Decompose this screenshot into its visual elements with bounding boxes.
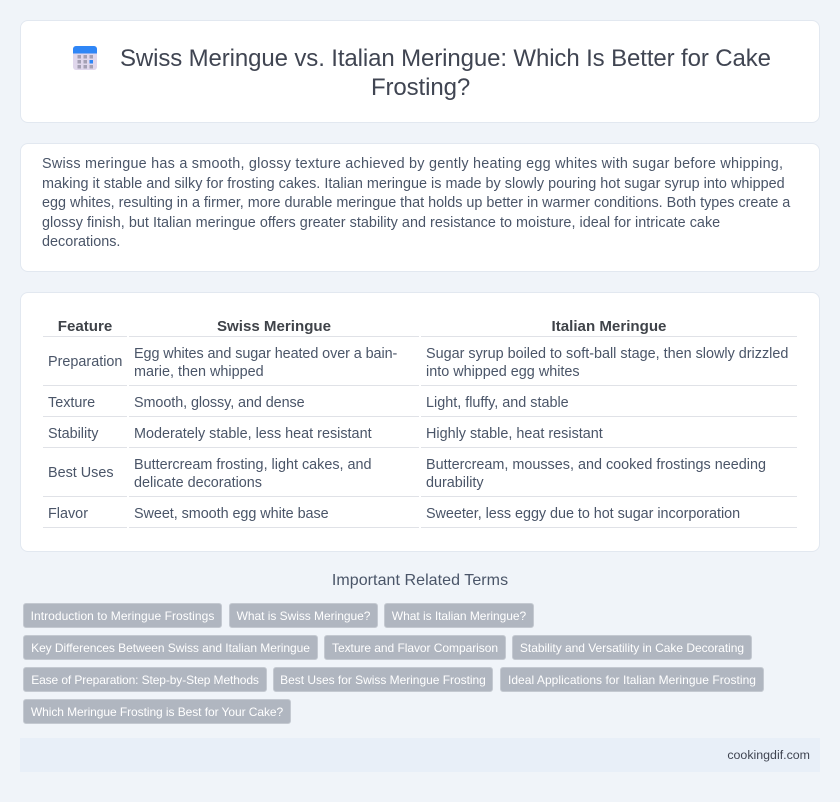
row: preparation	[48, 346, 788, 380]
row: preparation: marie, then whipped	[134, 364, 264, 380]
row: preparation: Preparation	[48, 354, 122, 370]
footer	[20, 738, 820, 772]
icon: calendar	[73, 46, 97, 70]
row: preparation: Egg whites and sugar heated over a bain-	[134, 346, 397, 362]
title	[120, 45, 771, 101]
tag: What is Italian Meringue?	[392, 609, 526, 623]
row: best uses	[48, 457, 766, 491]
row: stability	[48, 426, 603, 442]
tag: Ease of Preparation: Step-by-Step Methods	[31, 673, 259, 687]
tag: Introduction to Meringue Frostings	[31, 609, 214, 623]
heading: important related terms: Important Related Terms	[332, 572, 508, 589]
tag	[384, 603, 534, 628]
title: Frosting?	[371, 74, 470, 101]
tag: Texture and Flavor Comparison	[332, 641, 498, 655]
row: flavor	[48, 506, 740, 522]
text block: introduction	[42, 156, 790, 250]
tag: Ideal Applications for Italian Meringue Frosting	[508, 673, 756, 687]
tag	[23, 699, 291, 724]
footer source: cookingdif.com	[727, 748, 810, 762]
row: flavor: Flavor	[48, 506, 88, 522]
table header: Italian Meringue	[552, 318, 666, 335]
tag: Which Meringue Frosting is Best for Your Cake?	[31, 705, 283, 719]
tag	[500, 667, 764, 692]
row: stability: Highly stable, heat resistant	[426, 426, 603, 442]
panel: introduction	[20, 143, 820, 272]
row: texture: Light, fluffy, and stable	[426, 395, 569, 411]
row: best uses: durability	[426, 475, 484, 491]
row: texture: Texture	[48, 395, 95, 411]
text block: introduction: egg whites, resulting in a firmer, more durable meringue that holds up better in warmer conditions. Both types create a	[42, 195, 790, 211]
row: stability: Moderately stable, less heat resistant	[134, 426, 372, 442]
row: best uses: delicate decorations	[134, 475, 262, 491]
row: best uses: Buttercream, mousses, and cooked frostings needing	[426, 457, 766, 473]
row: texture	[48, 395, 569, 411]
tag	[23, 667, 267, 692]
table header: Feature	[58, 318, 112, 335]
tag: Stability and Versatility in Cake Decorating	[520, 641, 744, 655]
text block: introduction: decorations.	[42, 234, 120, 250]
row: flavor: Sweeter, less eggy due to hot sugar incorporation	[426, 506, 740, 522]
panel: comparison table	[20, 292, 820, 552]
tag	[512, 635, 752, 660]
tag: Key Differences Between Swiss and Italian Meringue	[31, 641, 310, 655]
row: preparation: Sugar syrup boiled to soft-ball stage, then slowly drizzled	[426, 346, 788, 362]
title: Swiss Meringue vs. Italian Meringue: Which Is Better for Cake	[120, 45, 771, 72]
row: flavor: Sweet, smooth egg white base	[134, 506, 329, 522]
table header: Swiss Meringue	[217, 318, 331, 335]
tag	[324, 635, 506, 660]
row: best uses: Best Uses	[48, 465, 114, 481]
row: stability: Stability	[48, 426, 98, 442]
row: best uses: Buttercream frosting, light cakes, and	[134, 457, 372, 473]
text block: introduction: glossy finish, but Italian meringue offers greater stability and resistance to moisture, ideal for intricate cake	[42, 214, 720, 230]
tag	[23, 635, 318, 660]
text block: introduction: making it stable and silky for frosting cakes. Italian meringue is made by slowly pouring hot sugar syrup into whipped	[42, 176, 785, 192]
tag	[229, 603, 378, 628]
panel: header	[20, 20, 820, 123]
tag	[273, 667, 493, 692]
table header	[58, 318, 666, 335]
tag: Best Uses for Swiss Meringue Frosting	[280, 673, 486, 687]
text block: introduction: Swiss meringue has a smooth, glossy texture achieved by gently heating egg whites with sugar before whipping,	[42, 156, 783, 172]
tag list: related terms	[23, 603, 764, 724]
row: texture: Smooth, glossy, and dense	[134, 395, 305, 411]
row: preparation: into whipped egg whites	[426, 364, 580, 380]
tag: What is Swiss Meringue?	[237, 609, 370, 623]
tag	[23, 603, 222, 628]
